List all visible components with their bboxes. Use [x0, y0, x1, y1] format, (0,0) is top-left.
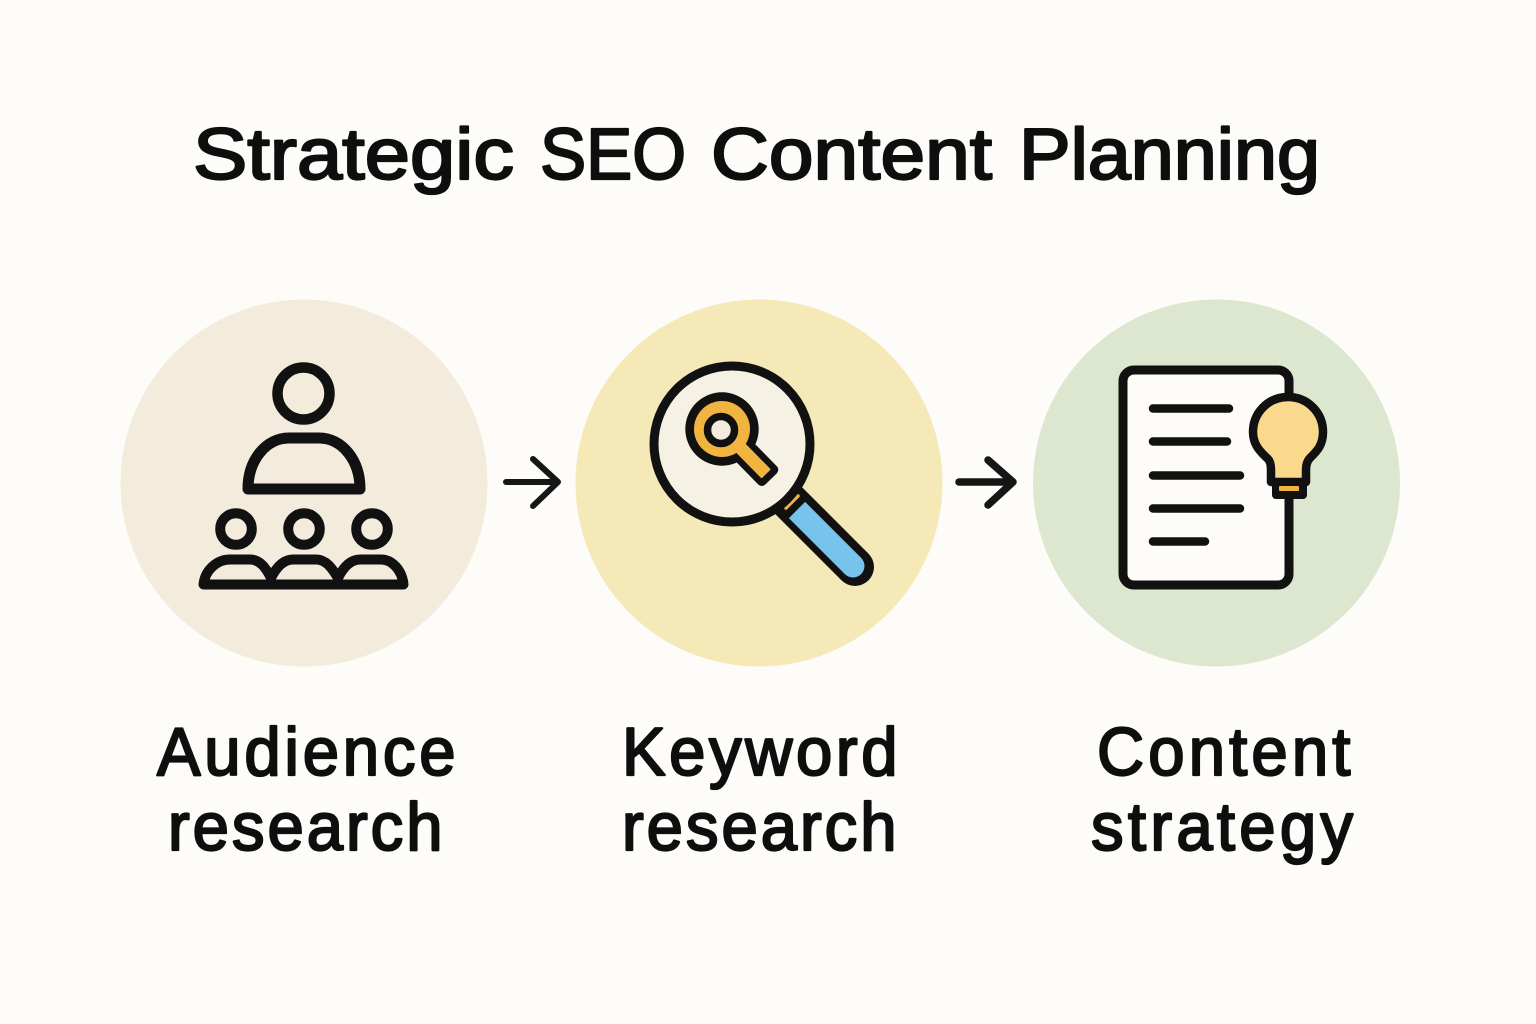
label: content strategy	[1091, 715, 1354, 865]
label: audience research	[157, 715, 456, 865]
label: keyword research: Keyword	[622, 715, 898, 790]
handle	[788, 500, 855, 567]
bulb base	[1272, 478, 1307, 499]
label: audience research: Audience	[157, 715, 456, 790]
arrow: keyword to content	[959, 460, 1013, 505]
circle: keyword background	[576, 300, 942, 666]
label: content strategy: Content	[1097, 715, 1351, 790]
inner key-shaped search icon	[713, 420, 780, 488]
title: Strategic	[193, 115, 514, 195]
icon: magnifying glass	[654, 366, 874, 586]
icon: audience group	[204, 368, 404, 584]
title: Content	[711, 115, 992, 195]
circle: audience background	[120, 300, 488, 666]
document	[1123, 370, 1289, 585]
title: SEO	[540, 115, 686, 195]
arrow: audience to keyword	[506, 459, 558, 506]
panel: keyword research	[576, 300, 942, 865]
panel: content strategy	[1033, 300, 1400, 865]
lens	[654, 366, 810, 522]
bulb	[1253, 397, 1323, 482]
text lines	[1153, 408, 1240, 542]
label: audience research: research	[168, 790, 443, 865]
title: Planning	[1019, 115, 1320, 195]
label: keyword research: research	[622, 790, 897, 865]
circle: content background	[1033, 300, 1400, 666]
label: keyword research	[622, 715, 898, 865]
label: content strategy: strategy	[1091, 790, 1354, 865]
panel: audience research	[120, 300, 488, 865]
icon: document with light bulb	[1123, 370, 1323, 585]
